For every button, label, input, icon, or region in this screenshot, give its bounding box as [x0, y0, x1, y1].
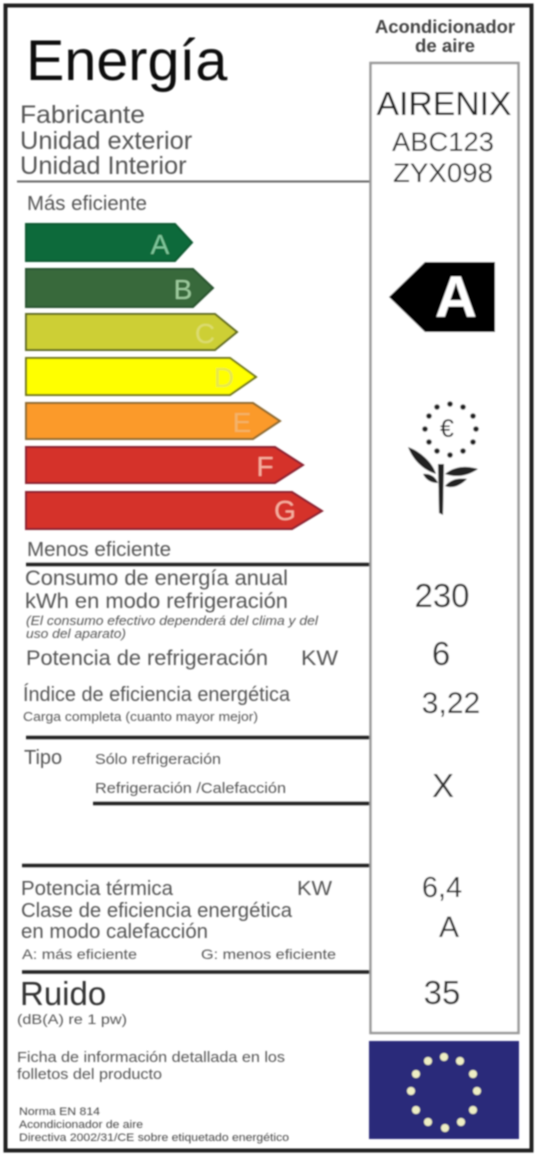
- rating badge: [389, 262, 495, 332]
- data values: 6,4: [422, 872, 462, 904]
- type options: [24, 747, 286, 797]
- energy scale arrows: [26, 224, 322, 529]
- data values: 3,22: [422, 687, 480, 720]
- data values: 35: [424, 974, 460, 1011]
- data values: 6: [432, 635, 450, 672]
- arrow A: [26, 224, 192, 261]
- heating block: Potencia térmica: [21, 878, 174, 900]
- appliance type heading: Acondicionador: [375, 17, 515, 37]
- icon: EU ecolabel flower: [408, 401, 479, 515]
- annual consumption block: uso del aparato): [26, 627, 126, 641]
- annual consumption block: Consumo de energía anual: [25, 566, 288, 590]
- right data panel: [370, 63, 518, 1033]
- data values: 230: [414, 577, 470, 614]
- product sheet note: [17, 1049, 285, 1083]
- icon: EU ecolabel flower: €: [440, 415, 454, 443]
- efficiency index block: Índice de eficiencia energética: [23, 683, 291, 706]
- section divider lines: [17, 182, 370, 972]
- product sheet note: Ficha de información detallada en los: [17, 1049, 285, 1066]
- model identifiers: ABC123: [392, 127, 494, 157]
- standards note: Directiva 2002/31/CE sobre etiquetado energético: [19, 1132, 289, 1144]
- efficiency index block: [23, 683, 291, 724]
- arrow E: E: [233, 407, 251, 438]
- arrow F: [26, 447, 303, 483]
- arrow C: [26, 314, 237, 350]
- standards note: Acondicionador de aire: [19, 1119, 143, 1131]
- model identifiers: ZYX098: [393, 158, 493, 188]
- more efficient label: Más eficiente: [27, 193, 147, 215]
- manufacturer labels: [20, 101, 193, 180]
- arrow B: B: [174, 274, 192, 305]
- arrow B: [26, 269, 213, 307]
- annual consumption block: (El consumo efectivo dependerá del clima y del: [26, 614, 319, 628]
- type options: Refrigeración /Calefacción: [95, 780, 286, 797]
- type options: Tipo: [24, 747, 62, 769]
- cooling power row: Potencia de refrigeración: [26, 647, 268, 670]
- appliance type heading: de aire: [415, 36, 475, 56]
- manufacturer labels: Unidad exterior: [20, 127, 193, 155]
- rating badge: A: [435, 265, 477, 330]
- efficiency index block: Carga completa (cuanto mayor mejor): [23, 709, 258, 724]
- arrow D: D: [214, 362, 234, 393]
- heating block: G: menos eficiente: [201, 946, 336, 962]
- data values: A: [439, 911, 459, 944]
- standards note: Norma EN 814: [19, 1106, 100, 1118]
- arrow A: A: [151, 229, 170, 260]
- standards note: [19, 1106, 289, 1144]
- heating block: A: más eficiente: [22, 946, 137, 962]
- arrow F: F: [256, 451, 274, 482]
- appliance type heading: [375, 17, 515, 56]
- data values: [414, 577, 480, 1011]
- heating block: Clase de eficiencia energética: [21, 900, 293, 922]
- noise heading: Ruido: [20, 975, 106, 1012]
- less efficient label: Menos eficiente: [27, 539, 171, 561]
- model identifiers: [376, 85, 512, 188]
- manufacturer labels: Fabricante: [20, 101, 145, 129]
- heating block: en modo calefacción: [21, 921, 208, 943]
- arrow C: C: [195, 318, 215, 349]
- type options: Sólo refrigeración: [95, 751, 221, 768]
- arrow G: G: [274, 495, 296, 526]
- arrow D: [26, 358, 256, 395]
- noise heading: [17, 975, 127, 1027]
- arrow E: [26, 403, 280, 439]
- heating block: [21, 878, 336, 962]
- arrow G: [26, 492, 322, 529]
- EU flag: [369, 1041, 519, 1139]
- data values: X: [432, 767, 454, 804]
- model identifiers: AIRENIX: [376, 85, 512, 122]
- heating block: KW: [297, 878, 332, 900]
- product sheet note: folletos del producto: [17, 1066, 162, 1083]
- annual consumption block: [25, 566, 319, 641]
- title: Energía: [26, 29, 227, 93]
- noise heading: (dB(A) re 1 pw): [17, 1011, 127, 1027]
- cooling power row: KW: [301, 647, 338, 670]
- annual consumption block: kWh en modo refrigeración: [25, 589, 288, 613]
- manufacturer labels: Unidad Interior: [20, 152, 187, 180]
